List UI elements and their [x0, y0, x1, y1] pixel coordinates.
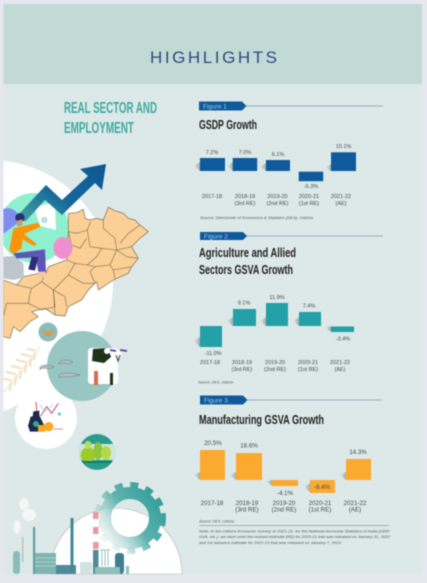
teal circle: fisheries and livestock — [40, 331, 127, 401]
icon: gear — [97, 485, 163, 551]
bar chart: GSDP growth: (2nd RE) — [266, 201, 289, 207]
bar chart: agriculture GSVA growth: 2019-20 — [265, 360, 285, 366]
bar chart: agriculture GSVA growth: 11.9% — [269, 295, 285, 301]
figure tag 3: Figure 3 — [204, 398, 228, 404]
heading: GSDP Growth: GSDP Growth — [199, 117, 257, 132]
footnote: GVA, etc.), we have used the revised estimate (RE) for 2020-21 that was released on January 31, 2022 — [199, 535, 390, 539]
footnote: and 1st advance estimate for 2021-22 that was released on January 7, 2022. — [199, 541, 342, 545]
heading: agriculture — [199, 245, 296, 277]
footnote — [199, 530, 390, 545]
bar chart: agriculture GSVA growth: 2017-18 — [200, 360, 220, 366]
bar chart: agriculture GSVA growth: (2nd RE) — [264, 367, 286, 373]
figure tag 1: Figure 1 — [203, 104, 227, 110]
heading: agriculture: Sectors GSVA Growth — [199, 262, 293, 277]
bar chart: agriculture GSVA growth: 2018-19 — [232, 360, 252, 366]
bar chart: manufacturing GSVA growth — [194, 440, 371, 514]
header band — [4, 4, 422, 84]
icon: rising arrow — [20, 164, 106, 222]
figure 3 — [194, 396, 390, 545]
footnote: Note: In the Odisha Economic Survey of 2021-22, for the National Accounts Statistics of India (GDP, — [199, 530, 390, 534]
bar chart: manufacturing GSVA growth: 2018-19 — [236, 500, 259, 507]
bar chart: agriculture GSVA growth: (AE) — [334, 367, 346, 373]
title: HIGHLIGHTS — [150, 48, 277, 67]
bar chart: agriculture GSVA growth: -11.0% — [204, 351, 222, 357]
bar chart: manufacturing GSVA growth: 2017-18 — [201, 500, 224, 507]
bar chart: agriculture GSVA growth: 2021-22 — [330, 360, 350, 366]
section heading: EMPLOYMENT — [64, 120, 134, 137]
heading: agriculture: Agriculture and Allied — [199, 245, 296, 260]
heading: manufacturing: Manufacturing GSVA Growth — [199, 412, 324, 427]
bar chart: agriculture GSVA growth: 9.1% — [238, 300, 250, 306]
bar chart: agriculture GSVA growth: (3rd RE) — [232, 367, 253, 373]
icon: money bag and growth chart — [28, 402, 63, 432]
pink blob — [54, 237, 72, 259]
bar chart: GSDP growth: (1st RE) — [299, 201, 319, 207]
bar chart: GSDP growth: 2020-21 — [299, 194, 319, 200]
bar chart: agriculture GSVA growth: (1st RE) — [298, 367, 318, 373]
bar chart: manufacturing GSVA growth: (3rd RE) — [235, 506, 259, 514]
bar chart: agriculture GSVA growth — [194, 295, 354, 373]
bar chart: agriculture GSVA growth: 2020-21 — [298, 360, 318, 366]
bar chart: agriculture GSVA growth: 7.4% — [303, 304, 315, 310]
bar chart: manufacturing GSVA growth: 18.6% — [240, 442, 258, 450]
icon: wheat — [4, 347, 40, 392]
section heading: REAL SECTOR AND — [64, 100, 157, 117]
white backdrop circles — [0, 160, 113, 449]
bar chart: manufacturing GSVA growth: 2021-22 — [344, 500, 367, 507]
bar chart: GSDP growth: (3rd RE) — [235, 201, 256, 207]
bar chart: manufacturing GSVA growth: 2020-21 — [309, 500, 332, 507]
bar chart: GSDP growth: 7.2% — [206, 150, 218, 156]
icon: crab circle — [38, 322, 58, 342]
bar chart: GSDP growth: 10.1% — [336, 144, 351, 150]
bar chart: GSDP growth: 7.0% — [239, 150, 251, 156]
bar chart: manufacturing GSVA growth: -8.4% — [314, 484, 331, 491]
bar chart: GSDP growth: (AE) — [336, 201, 347, 207]
section heading — [64, 100, 157, 137]
bar chart: GSDP growth — [194, 144, 356, 207]
source note 3: Source: DES, Odisha — [199, 520, 234, 524]
figure tag 1 — [199, 102, 383, 110]
bar chart: GSDP growth: 2018-19 — [235, 194, 255, 200]
bar chart: manufacturing GSVA growth: 2019-20 — [273, 500, 296, 507]
source note 1: Source: Directorate of Economics & Statistics (DES), Odisha — [200, 216, 313, 220]
figure 2 — [194, 232, 383, 384]
smoke — [14, 498, 36, 534]
bar chart: GSDP growth: 2021-22 — [331, 194, 351, 200]
bar chart: manufacturing GSVA growth: 20.5% — [204, 440, 222, 447]
figure tag 2 — [200, 232, 383, 240]
bar chart: manufacturing GSVA growth: (1st RE) — [309, 506, 331, 514]
bar chart: GSDP growth: -5.3% — [304, 184, 318, 190]
figure tag 3 — [200, 396, 382, 404]
bar chart: manufacturing GSVA growth: (AE) — [349, 506, 361, 514]
striped tower — [93, 512, 98, 574]
source note 2: Source: DES, Odisha — [198, 380, 233, 384]
bar chart: GSDP growth: 6.1% — [272, 152, 284, 158]
map of Odisha — [3, 207, 148, 338]
bar chart: GSDP growth: 2019-20 — [267, 194, 288, 200]
mint circle with person backdrop — [0, 193, 69, 263]
icon: fish — [40, 360, 80, 378]
bar chart: manufacturing GSVA growth: -4.1% — [277, 490, 294, 497]
factory skyline — [13, 498, 129, 574]
figure 1 — [194, 102, 383, 220]
illustration: left column — [0, 160, 182, 574]
divider — [199, 524, 389, 526]
figure tag 2: Figure 2 — [204, 234, 228, 240]
icon: trees circle — [79, 434, 115, 470]
icon: person seated with laptop — [3, 213, 48, 280]
white dome — [50, 508, 182, 574]
bar chart: agriculture GSVA growth: -3.4% — [336, 336, 350, 342]
icon: cow — [88, 348, 127, 385]
bar chart: manufacturing GSVA growth: 14.3% — [349, 449, 367, 456]
bar chart: manufacturing GSVA growth: (2nd RE) — [272, 506, 296, 514]
bar chart: GSDP growth: 2017-18 — [202, 194, 222, 200]
